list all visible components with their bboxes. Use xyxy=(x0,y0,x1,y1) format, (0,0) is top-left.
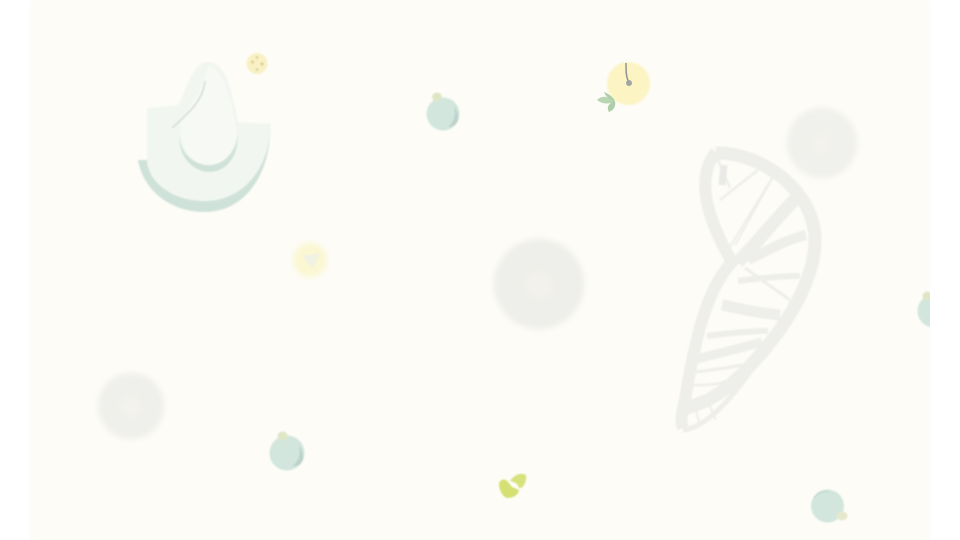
blurred grey circle: centre xyxy=(494,239,584,329)
hat brim shadow xyxy=(138,123,270,212)
icon: sun hat xyxy=(138,62,270,212)
helix lower outer strand xyxy=(683,372,750,430)
rungs xyxy=(738,198,796,262)
helix strand crossing xyxy=(682,152,732,428)
icon: round fruit top centre xyxy=(426,92,460,130)
blurred grey circle: lower left xyxy=(98,373,164,439)
hat crease xyxy=(172,81,205,128)
left seed xyxy=(499,479,519,498)
icon: small yellow seed disc xyxy=(246,53,268,74)
leaves xyxy=(597,97,615,104)
hat crown highlight xyxy=(180,66,237,165)
hat band xyxy=(179,134,238,172)
icon: lime green split seeds xyxy=(499,474,526,498)
hat body xyxy=(147,62,270,201)
icon: round fruit clipped at right edge xyxy=(917,291,930,328)
blurred grey circle: upper right xyxy=(787,108,857,178)
icon: round fruit lower left xyxy=(270,432,304,470)
illustration canvas xyxy=(91,52,930,524)
icon: DNA-like double helix xyxy=(680,152,815,430)
icon: round fruit bottom right xyxy=(811,490,848,522)
icon: pale yellow blossom xyxy=(293,243,327,277)
right seed xyxy=(510,474,526,488)
helix strand upper xyxy=(680,153,815,410)
helix knot xyxy=(722,165,724,185)
icon: yellow flower with stem xyxy=(597,62,650,112)
